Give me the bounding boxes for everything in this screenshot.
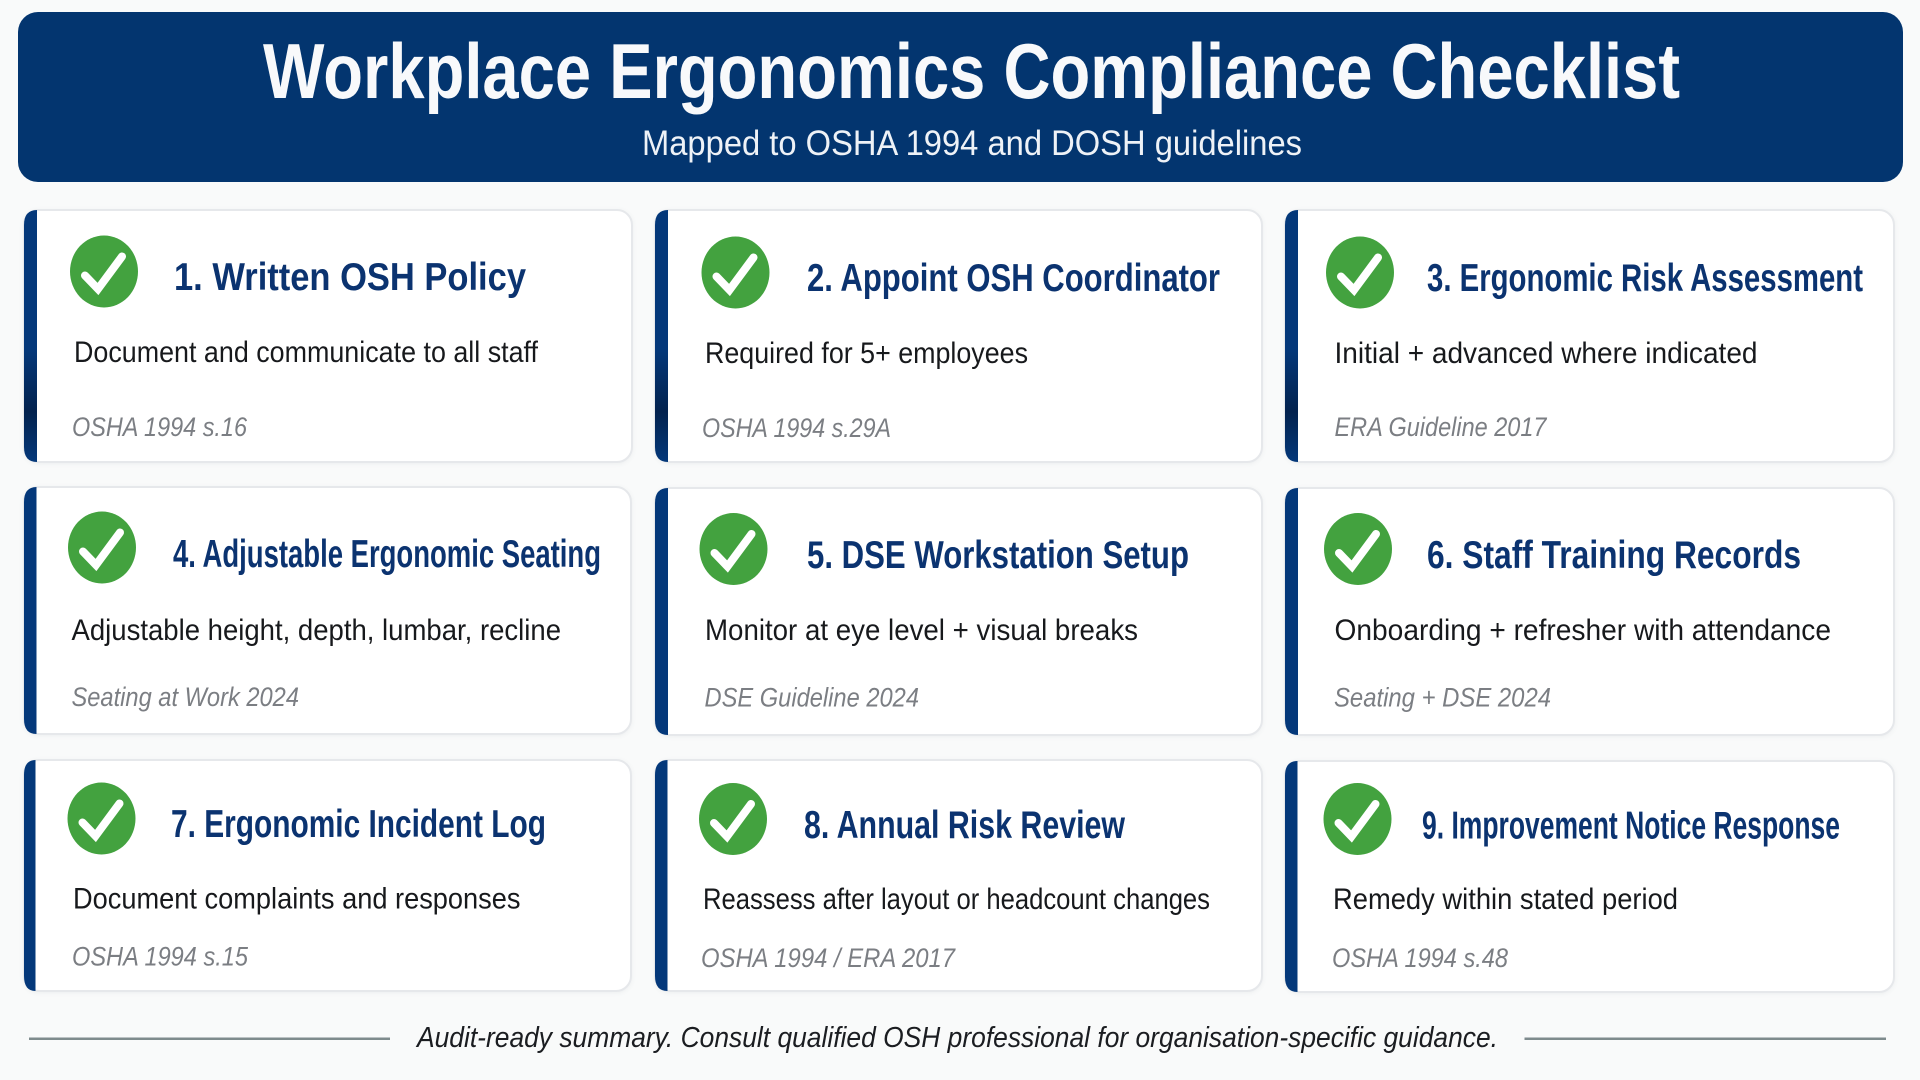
header background (18, 12, 1903, 182)
panel: card 1 Written OSH Policy (24, 210, 632, 462)
card heading: 7. Ergonomic Incident Log (171, 803, 546, 846)
accent bar (1285, 761, 1298, 992)
accent bar (24, 210, 37, 462)
citation: ERA Guideline 2017 (1334, 412, 1548, 442)
description: Initial + advanced where indicated (1334, 337, 1758, 370)
card heading: 6. Staff Training Records (1427, 534, 1801, 577)
panel: card 4 Adjustable Ergonomic Seating (24, 487, 631, 734)
citation: DSE Guideline 2024 (704, 682, 919, 712)
panel: card 7 Ergonomic Incident Log (24, 760, 631, 991)
icon: green check (1324, 783, 1392, 855)
header banner (18, 12, 1903, 182)
accent bar (24, 487, 36, 734)
description: Onboarding + refresher with attendance (1334, 614, 1831, 647)
citation: Seating at Work 2024 (72, 682, 299, 712)
accent bar (1285, 210, 1298, 462)
citation: OSHA 1994 / ERA 2017 (701, 943, 956, 973)
citation: Seating + DSE 2024 (1334, 682, 1551, 712)
description: Remedy within stated period (1333, 883, 1678, 916)
card heading: 8. Annual Risk Review (804, 804, 1126, 847)
card heading: 2. Appoint OSH Coordinator (807, 257, 1220, 300)
description: Monitor at eye level + visual breaks (705, 614, 1138, 647)
subtitle: Mapped to OSHA 1994 and DOSH guidelines (642, 124, 1302, 163)
description: Required for 5+ employees (705, 337, 1028, 370)
icon: green check (699, 783, 767, 855)
accent bar (655, 488, 668, 735)
icon: green check (702, 236, 770, 308)
panel: card 9 Improvement Notice Response (1285, 761, 1894, 992)
citation: OSHA 1994 s.15 (72, 942, 248, 972)
panel: card 5 DSE Workstation Setup (655, 488, 1262, 735)
citation: OSHA 1994 s.16 (72, 412, 247, 442)
accent bar (1285, 488, 1298, 735)
description: Document complaints and responses (73, 882, 520, 916)
icon: green check (1326, 236, 1394, 308)
panel: card 6 Staff Training Records (1285, 488, 1894, 735)
icon: green check (70, 236, 138, 308)
card heading: 4. Adjustable Ergonomic Seating (173, 533, 601, 576)
citation: OSHA 1994 s.48 (1332, 943, 1508, 973)
panel: card 2 Appoint OSH Coordinator (655, 210, 1262, 462)
description: Reassess after layout or headcount changes (703, 883, 1210, 916)
panel: card 3 Ergonomic Risk Assessment (1285, 210, 1894, 462)
footer text: Audit-ready summary. Consult qualified OSH professional for organisation-specific guidance. (415, 1022, 1498, 1054)
card heading: 5. DSE Workstation Setup (807, 534, 1189, 577)
panel: card 8 Annual Risk Review (655, 760, 1262, 991)
accent bar (655, 210, 668, 462)
icon: green check (700, 513, 768, 585)
icon: green check (68, 512, 136, 584)
description: Adjustable height, depth, lumbar, recline (72, 614, 561, 647)
description: Document and communicate to all staff (74, 336, 539, 369)
title: Workplace Ergonomics Compliance Checklist (263, 27, 1680, 115)
icon: green check (68, 782, 136, 854)
accent bar (655, 760, 668, 991)
accent bar (24, 760, 36, 991)
card heading: 1. Written OSH Policy (174, 256, 527, 299)
citation: OSHA 1994 s.29A (702, 413, 891, 443)
icon: green check (1324, 513, 1392, 585)
